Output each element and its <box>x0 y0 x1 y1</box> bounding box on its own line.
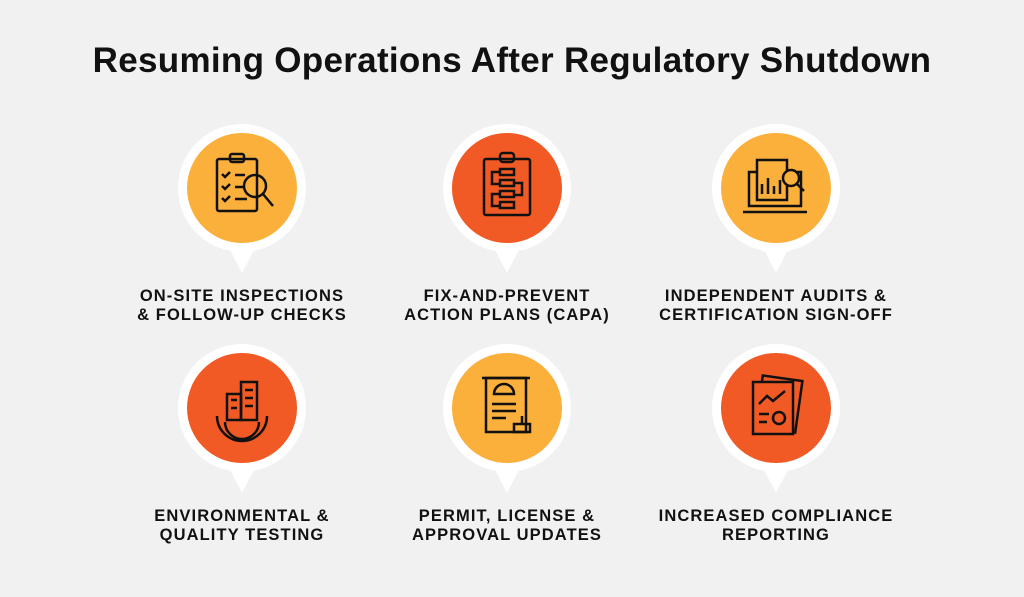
item: independent audits: INDEPENDENT AUDITS & <box>665 287 887 305</box>
item: permit license: PERMIT, LICENSE & <box>419 507 595 525</box>
item: environmental testing: QUALITY TESTING <box>160 526 324 544</box>
item: independent audits: CERTIFICATION SIGN-OFF <box>659 306 893 324</box>
item: environmental testing: ENVIRONMENTAL & <box>154 507 330 525</box>
item: fix-and-prevent: ACTION PLANS (CAPA) <box>404 306 610 324</box>
item: on-site inspections: & FOLLOW-UP CHECKS <box>137 306 347 324</box>
item: fix-and-prevent <box>404 124 610 324</box>
item: on-site inspections <box>137 124 347 324</box>
item: permit license <box>412 344 602 544</box>
item: independent audits <box>659 124 893 324</box>
title: Resuming Operations After Regulatory Shutdown <box>93 41 931 80</box>
item: compliance reporting: INCREASED COMPLIANCE <box>659 507 893 525</box>
item: on-site inspections: ON-SITE INSPECTIONS <box>140 287 344 305</box>
item: permit license: APPROVAL UPDATES <box>412 526 602 544</box>
item: compliance reporting: REPORTING <box>722 526 830 544</box>
item: environmental testing <box>154 344 330 544</box>
item: fix-and-prevent: FIX-AND-PREVENT <box>424 287 590 305</box>
item: compliance reporting <box>659 344 893 544</box>
